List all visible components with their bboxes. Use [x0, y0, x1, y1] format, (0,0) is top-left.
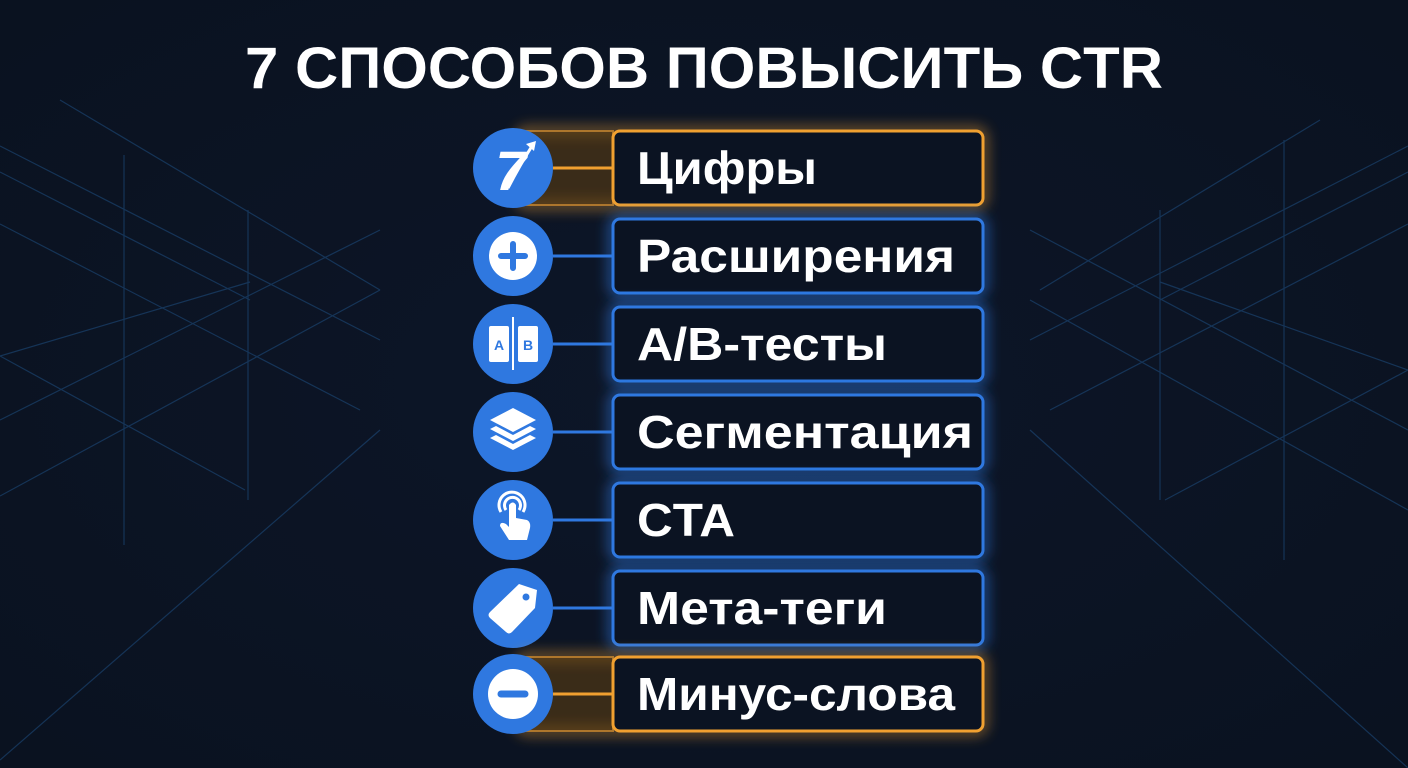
item 4: Сегментация — [473, 392, 983, 472]
item 3: A/B-тесты: B — [523, 337, 533, 353]
item 2: Расширения: Расширения — [637, 230, 955, 282]
item 7: Минус-слова: Минус-слова — [637, 668, 955, 720]
item 6: Мета-теги — [473, 568, 983, 648]
item 1: Цифры: Цифры — [637, 142, 817, 194]
item 5: CTA: CTA — [637, 494, 735, 546]
item 1: Цифры — [473, 128, 983, 208]
item 4: Сегментация: Сегментация — [637, 406, 973, 458]
item 3: A/B-тесты: A/B-тесты — [637, 318, 887, 370]
item 3: A/B-тесты: A — [494, 337, 504, 353]
title: 7 СПОСОБОВ ПОВЫСИТЬ CTR — [245, 36, 1163, 101]
item 5: CTA — [473, 480, 983, 560]
item 3: A/B-тесты — [473, 304, 983, 384]
item 7: Минус-слова — [473, 654, 983, 734]
item 6: Мета-теги: Мета-теги — [637, 582, 887, 634]
item 2: Расширения — [473, 216, 983, 296]
list of methods — [473, 128, 983, 734]
item 1: Цифры: 7 — [495, 139, 529, 202]
